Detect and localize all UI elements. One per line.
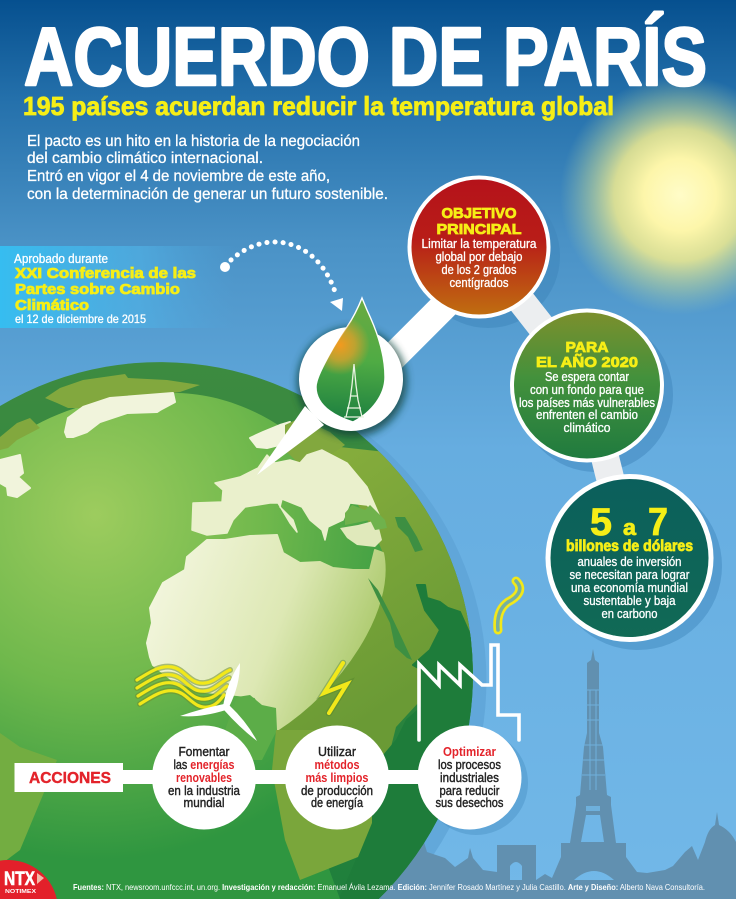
ocean: dark lower right xyxy=(372,584,473,899)
connector bar xyxy=(110,770,430,784)
intro paragraph xyxy=(27,133,388,203)
circle: 5 a 7 billones: a xyxy=(623,515,637,540)
continent: central africa green xyxy=(225,695,277,760)
approval banner: el 12 de diciembre de 2015 xyxy=(15,312,146,326)
continent: black sea xyxy=(345,505,387,530)
circle: para el año 2020: Se espera contar xyxy=(545,370,629,384)
circle: para el año 2020: climático xyxy=(564,421,611,435)
action: energías renovables: renovables xyxy=(176,770,232,785)
icon: factory xyxy=(419,645,519,740)
paris skyline xyxy=(370,649,736,899)
continent: uk xyxy=(250,422,290,448)
action: energías renovables xyxy=(152,726,256,830)
logo: NTX Notimex: NOTIMEX xyxy=(5,889,37,895)
continent: left olive islands xyxy=(0,418,40,450)
action: energías renovables: en la industria xyxy=(168,783,241,798)
approval banner: Aprobado durante xyxy=(14,252,108,266)
circle: objetivo principal: de los 2 grados xyxy=(442,263,516,277)
globe xyxy=(0,360,480,899)
intro paragraph: del cambio climático internacional. xyxy=(27,150,263,167)
circle: 5 a 7 billones: anuales de inversión xyxy=(578,555,682,569)
circle: objetivo principal: Limitar la temperatura xyxy=(422,237,537,251)
circle: 5 a 7 billones xyxy=(548,476,711,640)
circle: para el año 2020: EL AÑO 2020 xyxy=(536,353,638,371)
circle: para el año 2020: PARA xyxy=(566,339,609,356)
approval banner: XXI Conferencia de las xyxy=(15,265,196,282)
action: optimizar procesos: sus desechos xyxy=(436,795,504,810)
main sphere xyxy=(0,393,385,899)
action: energías renovables: mundial xyxy=(184,795,225,810)
circle: 5 a 7 billones: billones de dólares xyxy=(566,538,693,555)
icon: lightning bolt xyxy=(324,663,347,713)
action: métodos más limpios: Utilizar xyxy=(318,744,357,759)
circle: 5 a 7 billones: una economía mundial xyxy=(571,581,688,595)
circle: objetivo principal: centígrados xyxy=(450,276,508,290)
sea: red sea xyxy=(368,578,412,660)
action: métodos más limpios: métodos xyxy=(314,757,360,772)
circle: para el año 2020: con un fondo para que xyxy=(530,383,644,397)
pointer xyxy=(257,406,324,475)
sea: caspian xyxy=(395,517,423,552)
icon: smoke xyxy=(498,581,520,630)
circle: 5 a 7 billones: 7 xyxy=(648,501,668,544)
footer credits: Fuentes: NTX, newsroom.unfccc.int, un.org. Investigación y redacción: Emanuel Ávila Lezama. Edición: Jennifer Rosado Martínez y Julia Castillo. Arte y Diseño: Alberto Nava Consultoría. xyxy=(73,882,705,892)
circle: objetivo principal: PRINCIPAL xyxy=(436,221,522,238)
connector bars between circles xyxy=(375,247,630,558)
approval banner: Partes sobre Cambio xyxy=(15,281,180,298)
actions timeline xyxy=(14,726,528,835)
icon: wind turbine xyxy=(180,663,257,741)
globe shadow xyxy=(0,368,486,899)
label: acciones: ACCIONES xyxy=(29,770,111,787)
action: optimizar procesos xyxy=(418,726,528,835)
action: optimizar procesos: Optimizar xyxy=(443,744,496,759)
action: optimizar procesos: para reducir xyxy=(440,783,500,798)
circle: para el año 2020 xyxy=(512,310,662,460)
icon: wind waves xyxy=(137,667,230,707)
action: energías renovables: las energías xyxy=(174,757,234,772)
circle: para el año 2020: enfrenten el cambio xyxy=(536,408,638,422)
continent: scandinavia green xyxy=(285,420,345,462)
action: métodos más limpios: de producción xyxy=(301,783,373,798)
action: energías renovables: Fomentar xyxy=(178,744,230,759)
circle: objetivo principal xyxy=(410,178,548,316)
intro paragraph: El pacto es un hito en la historia de la negociación xyxy=(27,133,360,150)
approval banner: Climático xyxy=(15,297,89,314)
circle: 5 a 7 billones: 5 xyxy=(590,501,612,544)
circle: 5 a 7 billones: sustentable y baja xyxy=(584,594,676,608)
continent: greenland back xyxy=(45,374,200,408)
continent: europe xyxy=(192,450,380,540)
circle: 5 a 7 billones: en carbono xyxy=(602,607,658,621)
label: acciones xyxy=(14,763,123,792)
action: optimizar procesos: los procesos xyxy=(438,757,501,772)
approval banner xyxy=(0,246,235,328)
circle: objetivo principal: OBJETIVO xyxy=(442,205,517,222)
logo: NTX Notimex: NTX xyxy=(4,869,35,890)
action: métodos más limpios xyxy=(285,726,389,830)
intro paragraph: Entró en vigor el 4 de noviembre de este año, xyxy=(27,168,330,185)
continent: south america xyxy=(272,730,372,880)
continent: canada xyxy=(0,455,30,497)
continent: lower left land xyxy=(0,733,57,865)
action: métodos más limpios: de energía xyxy=(311,795,364,810)
icon: leaf with eiffel tower xyxy=(316,298,385,422)
circle: 5 a 7 billones: se necesitan para lograr xyxy=(570,568,690,582)
dotted arrow xyxy=(220,242,343,311)
circle: objetivo principal: global por debajo xyxy=(436,250,523,264)
continent: greenland xyxy=(65,393,175,437)
action: métodos más limpios: más limpios xyxy=(306,770,368,785)
circle shadows xyxy=(416,184,722,650)
action: optimizar procesos: industriales xyxy=(440,770,499,785)
intro paragraph: con la determinación de generar un futuro sostenible. xyxy=(27,186,388,203)
logo: NTX Notimex xyxy=(0,860,57,899)
subtitle: 195 países acuerdan reducir la temperatura global xyxy=(23,91,614,121)
circle: para el año 2020: los países más vulnerables xyxy=(519,396,655,410)
summit badge xyxy=(257,298,407,475)
continent: africa xyxy=(147,535,385,730)
ocean: olive right side xyxy=(279,447,473,754)
continent: turkey xyxy=(340,520,382,547)
sun xyxy=(560,75,736,315)
